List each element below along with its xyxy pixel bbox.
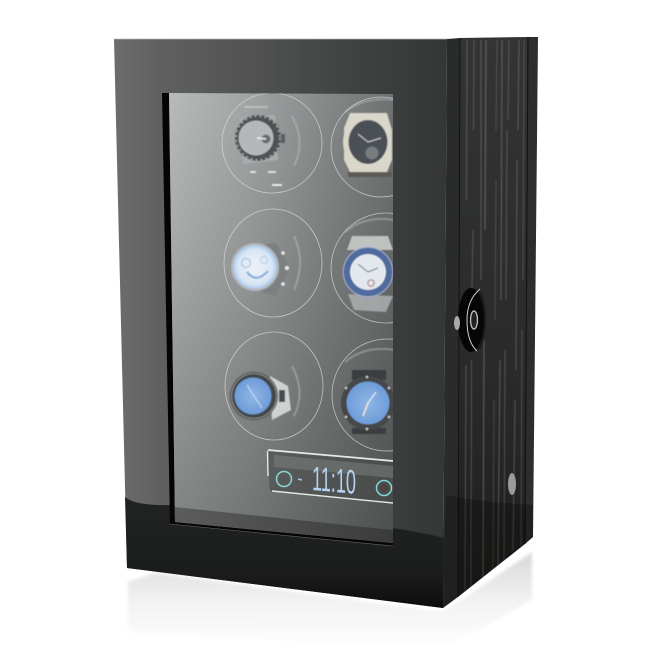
glass lower band (174, 507, 393, 543)
inner winder arcs (292, 99, 395, 416)
side wood veneer (458, 37, 528, 597)
side control knob (454, 288, 486, 352)
knob inner ring (470, 311, 478, 329)
silver pin (454, 316, 460, 330)
plinth seam highlight (170, 524, 393, 546)
glass base (165, 90, 397, 550)
veneer stripes (465, 40, 524, 590)
knob body (458, 288, 484, 352)
left touch button (276, 472, 292, 486)
top edge highlight (114, 38, 447, 40)
dash indicator (298, 479, 302, 480)
cabinet side panel (443, 37, 538, 608)
display frame lines (268, 450, 393, 503)
cabinet front frame (114, 39, 447, 608)
knob back disc (468, 289, 486, 351)
window recess black edge (162, 93, 393, 546)
watch: top right steel case (343, 113, 392, 177)
watch: middle right blue bezel (343, 236, 393, 312)
floor reflection (128, 552, 532, 650)
digital display panel (267, 450, 393, 503)
glass window (169, 93, 393, 543)
winder rings (222, 93, 393, 452)
display top reflection (274, 455, 393, 478)
band seams (458, 37, 528, 597)
glossy black plinth (125, 497, 444, 608)
display background (267, 451, 393, 503)
rear screw (508, 473, 516, 495)
side front-edge band (443, 38, 460, 608)
watch: middle left pale blue dial (231, 243, 290, 296)
side rear-edge band (525, 37, 538, 544)
watch: top left dark bezel (235, 106, 285, 186)
right touch button (376, 480, 392, 496)
product illustration: six-watch winder cabinet (114, 37, 538, 620)
knob rim highlight (467, 289, 480, 351)
side base gloss (443, 495, 533, 608)
frame panel (114, 39, 447, 608)
watch: bottom right blue dial (341, 370, 395, 434)
time readout: 11:10 (312, 460, 356, 502)
watch: bottom left blue dial (230, 372, 291, 420)
glass shading (170, 170, 393, 530)
